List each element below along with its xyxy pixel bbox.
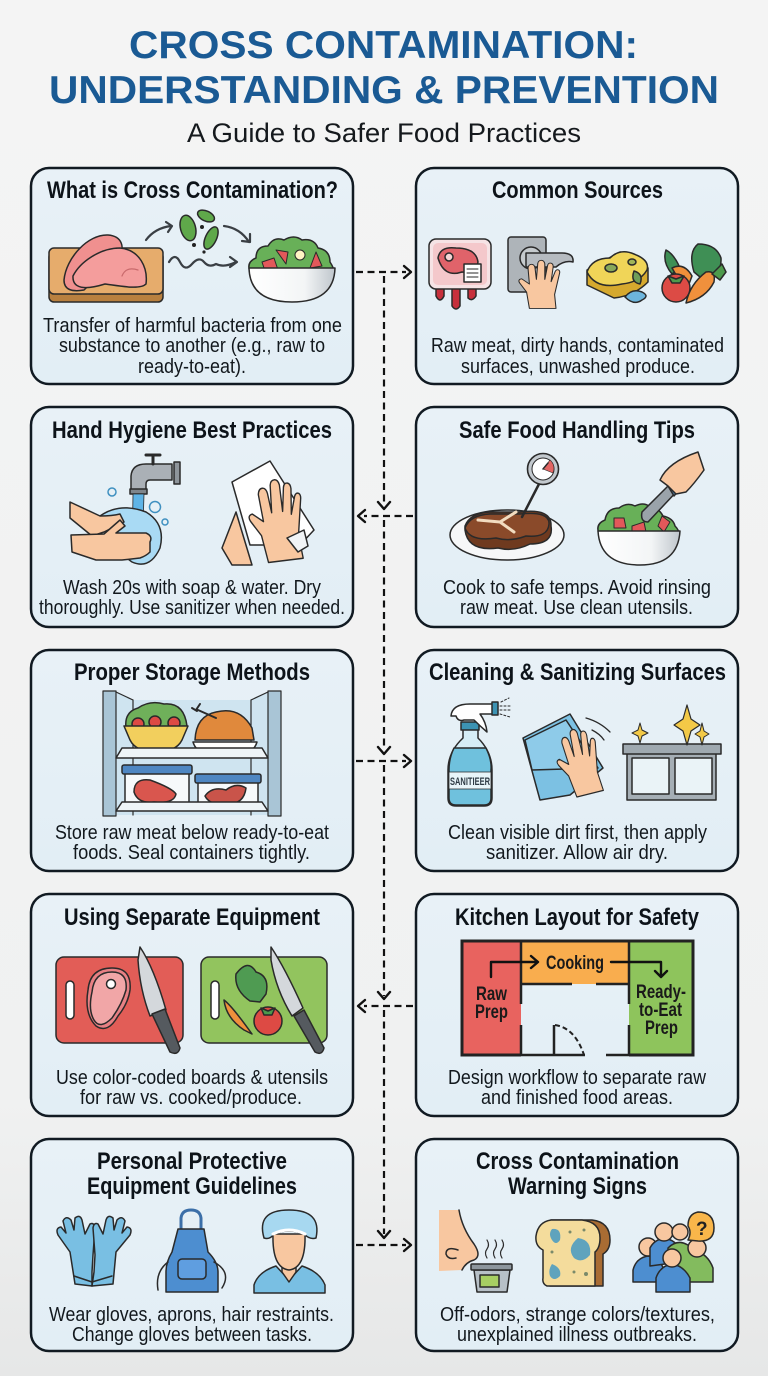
panel: personal protective equipment — [31, 1139, 353, 1351]
icon: group of people with question: ? — [696, 1219, 708, 1240]
body text: Wear gloves, aprons, hair restraints. — [49, 1303, 334, 1326]
body text: sanitizer. Allow air dry. — [486, 841, 668, 864]
body text — [43, 314, 342, 378]
icon: transfer arrows and bacteria — [146, 208, 250, 268]
diagram: kitchen floor plan: Prep — [475, 1001, 508, 1023]
body text — [39, 576, 345, 619]
body text — [55, 821, 329, 864]
body text: Clean visible dirt first, then apply — [448, 821, 708, 844]
icon: drying hands with towel — [222, 461, 314, 565]
heading: Warning Signs — [508, 1173, 647, 1200]
icon: hair net and face — [254, 1210, 325, 1293]
body text — [443, 576, 711, 619]
panel: proper storage — [31, 650, 353, 871]
icon: sanitizer spray bottle — [448, 698, 512, 806]
heading: Cross Contamination — [476, 1148, 679, 1175]
body text — [431, 334, 724, 378]
body text: Transfer of harmful bacteria from one — [43, 314, 342, 337]
icon: nose and smelly container — [439, 1210, 512, 1292]
heading: Using Separate Equipment — [64, 904, 320, 931]
heading: Proper Storage Methods — [74, 659, 310, 686]
body text: surfaces, unwashed produce. — [461, 355, 695, 378]
icon: fridge shelves with food — [103, 691, 281, 816]
body text — [448, 1066, 706, 1109]
heading — [476, 1148, 679, 1200]
heading: Hand Hygiene Best Practices — [52, 417, 332, 444]
title: CROSS CONTAMINATION: — [129, 24, 638, 67]
body text — [56, 1066, 328, 1109]
icon: unwashed produce — [662, 244, 726, 303]
heading: Personal Protective — [97, 1148, 287, 1175]
icon: dirty sponge — [587, 252, 648, 302]
heading: What is Cross Contamination? — [47, 177, 338, 204]
panel: kitchen layout — [416, 894, 738, 1116]
body text — [440, 1303, 715, 1346]
heading: Kitchen Layout for Safety — [455, 904, 699, 931]
icon: red cutting board with meat and knife — [56, 947, 183, 1053]
diagram: kitchen floor plan — [462, 941, 693, 1055]
diagram: kitchen floor plan: to-Eat — [639, 999, 682, 1021]
title — [49, 24, 719, 112]
body text: Design workflow to separate raw — [448, 1066, 706, 1089]
body text — [448, 821, 708, 864]
panel: hand hygiene — [31, 407, 353, 627]
panel: warning signs — [416, 1139, 738, 1351]
panel: what is cross contamination — [31, 168, 353, 384]
icon: salad with tongs — [598, 452, 704, 565]
panel: common sources — [416, 168, 738, 384]
icon: steak with thermometer — [450, 454, 564, 560]
icon: green cutting board with produce and knife — [201, 947, 327, 1053]
body text: Use color-coded boards & utensils — [56, 1066, 328, 1089]
body text: foods. Seal containers tightly. — [73, 841, 310, 864]
title: UNDERSTANDING & PREVENTION — [49, 69, 719, 112]
body text: Store raw meat below ready-to-eat — [55, 821, 329, 844]
subtitle: A Guide to Safer Food Practices — [187, 118, 581, 148]
body text: Wash 20s with soap & water. Dry — [63, 576, 322, 599]
icon: chicken on cutting board — [49, 235, 163, 302]
icon: faucet and washing hands — [70, 455, 180, 564]
icon: door handle and hand — [508, 237, 573, 308]
diagram: kitchen floor plan: Prep — [645, 1017, 678, 1039]
body text: Change gloves between tasks. — [72, 1323, 312, 1346]
icon: gloves — [57, 1216, 131, 1286]
diagram: kitchen floor plan: Ready- — [636, 981, 686, 1003]
diagram: kitchen floor plan: Raw — [476, 983, 508, 1005]
icon: clean counter with sparkles — [623, 705, 721, 800]
body text: raw meat. Use clean utensils. — [460, 596, 693, 619]
icon: moldy bread — [536, 1220, 610, 1286]
icon: cloth and hand wiping — [523, 714, 610, 800]
body text — [49, 1303, 334, 1346]
icon: apron — [157, 1210, 226, 1292]
panel: cleaning & sanitizing — [416, 650, 738, 871]
body text: Cook to safe temps. Avoid rinsing — [443, 576, 711, 599]
heading: Common Sources — [492, 177, 663, 204]
icon: salad bowl — [249, 237, 335, 302]
panel: separate equipment — [31, 894, 353, 1116]
body text: for raw vs. cooked/produce. — [80, 1086, 302, 1109]
body text: Raw meat, dirty hands, contaminated — [431, 334, 724, 357]
dashed flow connectors — [356, 266, 413, 1251]
body text: substance to another (e.g., raw to — [59, 334, 325, 357]
body text: ready-to-eat). — [138, 355, 246, 378]
body text: and finished food areas. — [481, 1086, 673, 1109]
icon: sanitizer spray bottle: SANITIEER — [450, 776, 490, 788]
body text: thoroughly. Use sanitizer when needed. — [39, 596, 345, 619]
panel: safe food handling — [416, 407, 738, 627]
heading: Safe Food Handling Tips — [459, 417, 695, 444]
salad bowl on shelf — [124, 703, 188, 752]
icon: group of people with question — [633, 1212, 714, 1292]
diagram: kitchen floor plan: Cooking — [546, 952, 604, 974]
roast chicken on plate — [192, 704, 257, 752]
body text: unexplained illness outbreaks. — [457, 1323, 697, 1346]
body text: Off-odors, strange colors/textures, — [440, 1303, 715, 1326]
icon: packaged raw meat — [429, 239, 491, 309]
heading: Equipment Guidelines — [87, 1173, 297, 1200]
heading — [87, 1148, 297, 1200]
raw meat containers — [122, 765, 261, 806]
